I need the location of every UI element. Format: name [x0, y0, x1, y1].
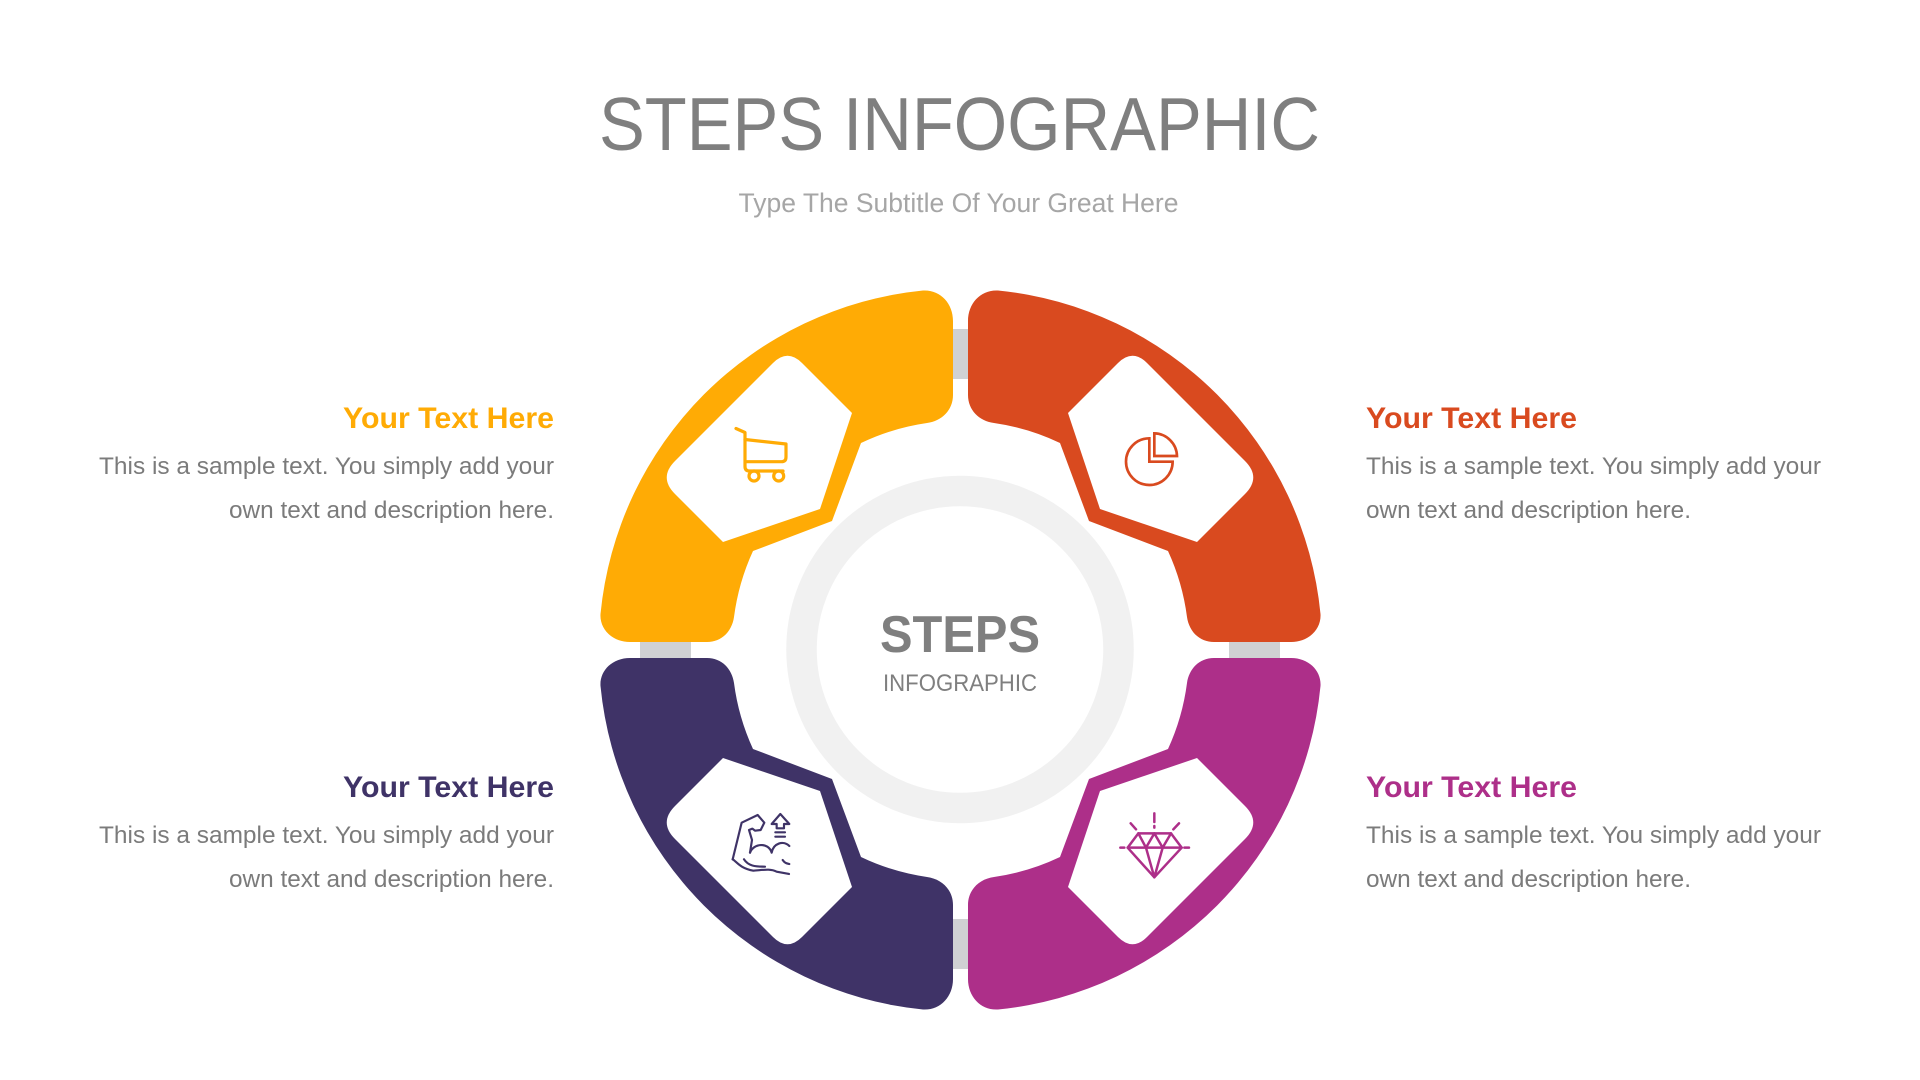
text block: red: This is a sample text. You simply add your [1366, 453, 1821, 480]
segment: magenta [968, 658, 1321, 1010]
connector: right [1229, 640, 1280, 660]
subtitle: Type The Subtitle Of Your Great Here [738, 188, 1178, 218]
text block: orange: Your Text Here [343, 402, 554, 435]
text block: purple: Your Text Here [343, 771, 554, 804]
icon: diamond [1120, 813, 1189, 877]
center heading: STEPS [880, 606, 1040, 664]
text block: purple: own text and description here. [229, 866, 554, 893]
text block: magenta: own text and description here. [1366, 866, 1691, 893]
segment: red [968, 290, 1321, 642]
title: STEPS INFOGRAPHIC [599, 82, 1320, 166]
text block: red [1366, 402, 1821, 524]
connector: left [640, 640, 691, 660]
segment: purple [600, 658, 953, 1010]
text block: red: own text and description here. [1366, 497, 1691, 524]
segment: orange [600, 290, 953, 642]
text block: orange: own text and description here. [229, 497, 554, 524]
icon: pie chart [1126, 433, 1177, 485]
text block: magenta: Your Text Here [1366, 771, 1577, 804]
center subheading: INFOGRAPHIC [883, 670, 1037, 697]
text block: orange [99, 402, 554, 524]
icon: shopping cart [736, 428, 786, 481]
connector: bottom [950, 919, 970, 969]
text block: purple [99, 771, 554, 893]
text block: magenta [1366, 771, 1821, 893]
text block: purple: This is a sample text. You simply add your [99, 822, 554, 849]
center ring [802, 491, 1118, 808]
icon: flexed arm with up arrow [733, 814, 789, 874]
text block: magenta: This is a sample text. You simply add your [1366, 822, 1821, 849]
text block: red: Your Text Here [1366, 402, 1577, 435]
text block: orange: This is a sample text. You simply add your [99, 453, 554, 480]
connector: top [950, 329, 970, 379]
